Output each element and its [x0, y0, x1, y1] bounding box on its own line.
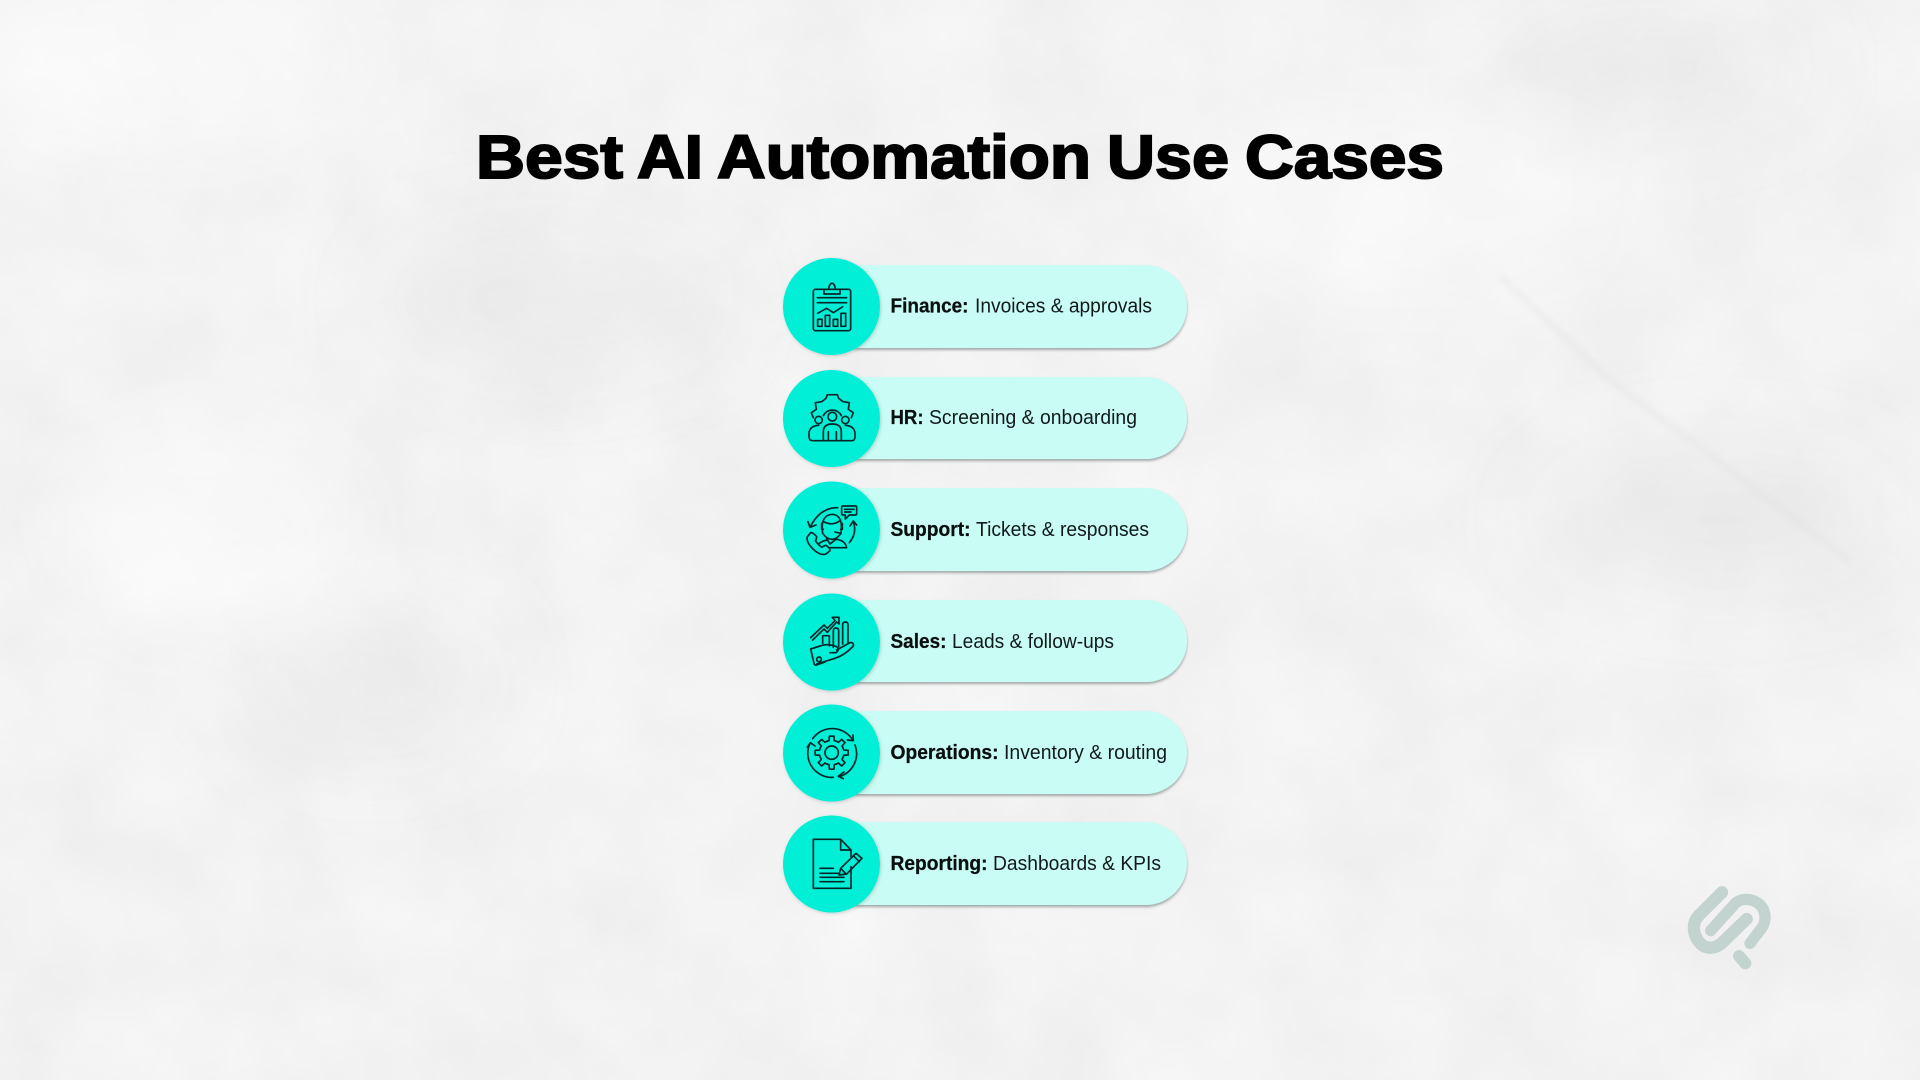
label: Support: Tickets & responses: [976, 519, 1149, 541]
label: Operations: Operations:: [890, 742, 998, 764]
label: Support: [890, 519, 1149, 541]
label: Finance: Finance:: [890, 296, 968, 318]
icon: customer support agent: [807, 506, 857, 554]
icon: team with gear: [809, 395, 855, 441]
title: Cases: [1245, 123, 1444, 191]
label: Reporting: [890, 853, 1161, 875]
label: Reporting: Reporting:: [890, 853, 988, 875]
label: Finance: Invoices & approvals: [975, 296, 1152, 318]
label: Sales: Sales:: [890, 631, 946, 653]
icon: brand logo: [1694, 892, 1765, 963]
icon: document with pencil: [813, 839, 862, 888]
label: Sales: Leads & follow-ups: [952, 631, 1114, 653]
icon: clipboard with chart: [813, 283, 851, 331]
row: Reporting: [783, 816, 1187, 912]
row: HR: [783, 370, 1187, 467]
title: Use: [1107, 123, 1229, 191]
label: Support: Support:: [890, 519, 970, 541]
label: Operations: [890, 742, 1167, 764]
label: HR: HR:: [890, 407, 924, 429]
label: Finance: [890, 296, 1152, 318]
label: Operations: Inventory & routing: [1004, 742, 1167, 764]
row: Finance: [783, 258, 1187, 355]
row: Sales: [783, 594, 1187, 690]
title: AI: [637, 123, 703, 191]
title: Best: [476, 123, 623, 191]
icon: gear with circular arrows: [807, 729, 857, 779]
label: Reporting: Dashboards & KPIs: [993, 853, 1161, 875]
row: Operations: [783, 704, 1187, 802]
list of use cases: [783, 258, 1187, 912]
icon: hand holding growth chart: [811, 617, 853, 665]
label: HR: Screening & onboarding: [929, 407, 1137, 429]
row: Support: [783, 482, 1187, 578]
title: Automation: [717, 123, 1091, 191]
